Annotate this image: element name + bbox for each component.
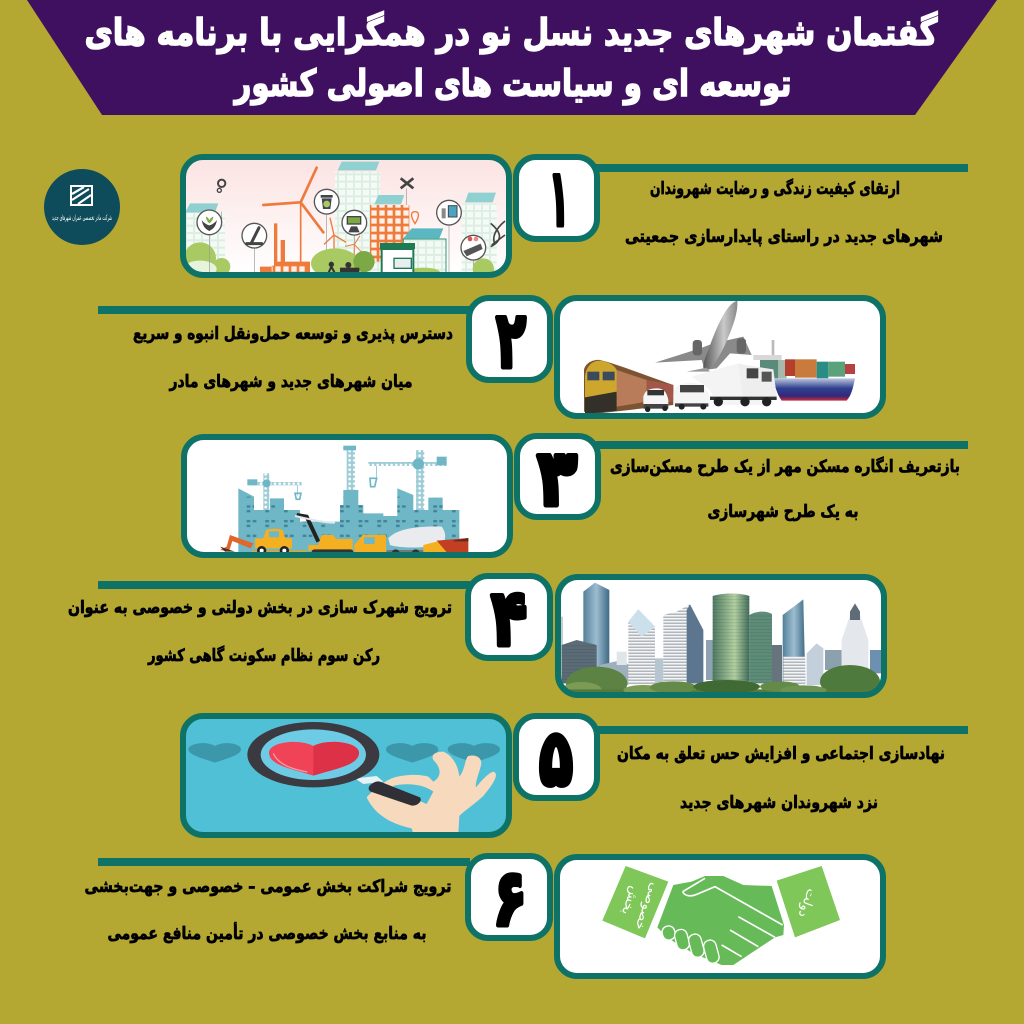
text 4 [68,598,452,666]
panel: item 1 [183,154,968,280]
panel: item 6 [84,854,883,976]
image frame 1 [183,157,509,275]
image frame 3 [184,437,510,555]
teal rule 2 [98,306,470,314]
illustration: handshake [557,857,883,976]
text 5 [617,744,945,813]
number box 3 [517,434,598,524]
text 3: به یک طرح شهرسازی [708,502,858,522]
image frame 5 [183,716,509,835]
text 4: ترویج شهرک سازی در بخش دولتی و خصوصی به عنوان [68,598,452,618]
text 6 [84,877,452,944]
text 3 [610,456,960,522]
number box 5 [516,714,597,804]
number box 2 [469,296,550,386]
title text: توسعه ای و سیاست های اصولی کشور [233,62,792,105]
image frame 6 [557,857,883,976]
number box 4 [468,574,550,664]
illustration: handshake: بخش [618,884,642,917]
text 2: دسترس پذیری و توسعه حمل‌ونقل انبوه و سریع [133,324,453,344]
text 5: نهادسازی اجتماعی و افزایش حس تعلق به مکان [617,744,945,764]
text 1: شهرهای جدید در راستای پایدارسازی جمعیتی [625,227,943,247]
number box 6: ۶ [493,854,527,944]
illustration: handshake: خصوصی [631,881,662,932]
teal rule 5 [596,726,968,734]
logo [44,169,120,245]
image frame 4 [558,577,884,695]
teal rule 1 [596,164,968,172]
text 5: نزد شهروندان شهرهای جدید [680,793,878,813]
teal rule 6 [98,858,470,866]
panel: item 2 [98,296,883,416]
text 2 [133,324,453,392]
text 4: رکن سوم نظام سکونت گاهی کشور [147,645,380,666]
number box 4: ۴ [491,574,527,664]
title text [84,11,938,105]
illustration: transport modes [557,298,883,416]
text 1 [625,178,943,247]
number box 2: ۲ [496,296,526,386]
text 2: میان شهرهای جدید و شهرهای مادر [169,372,412,392]
illustration: skyscrapers [561,580,881,692]
panel: item 5 [183,714,968,835]
teal rule 3 [596,441,968,449]
teal rule 4 [98,581,470,589]
illustration: heart under magnifier [183,716,509,835]
text 6: به منابع بخش خصوصی در تأمین منافع عمومی [108,922,426,944]
illustration: smart green city [186,160,506,272]
logo: شرکت مادر تخصصی عمران شهرهای جدید [52,213,112,222]
image frame 2 [557,298,883,416]
illustration: construction skyline [187,440,507,552]
title banner [27,0,997,115]
banner shape [27,0,997,115]
number box 3: ۳ [537,434,577,524]
number box 6 [468,854,550,944]
number box 1: ۱ [549,154,569,244]
text 6: ترویج شراکت بخش عمومی – خصوصی و جهت‌بخشی [84,877,452,897]
panel: item 4 [68,574,886,700]
panel: item 3 [184,434,968,560]
number box 5: ۵ [539,714,573,804]
illustration: handshake: دولت [795,886,819,919]
text 1: ارتقای کیفیت زندگی و رضایت شهروندان [650,178,900,199]
number box 1 [516,154,597,244]
